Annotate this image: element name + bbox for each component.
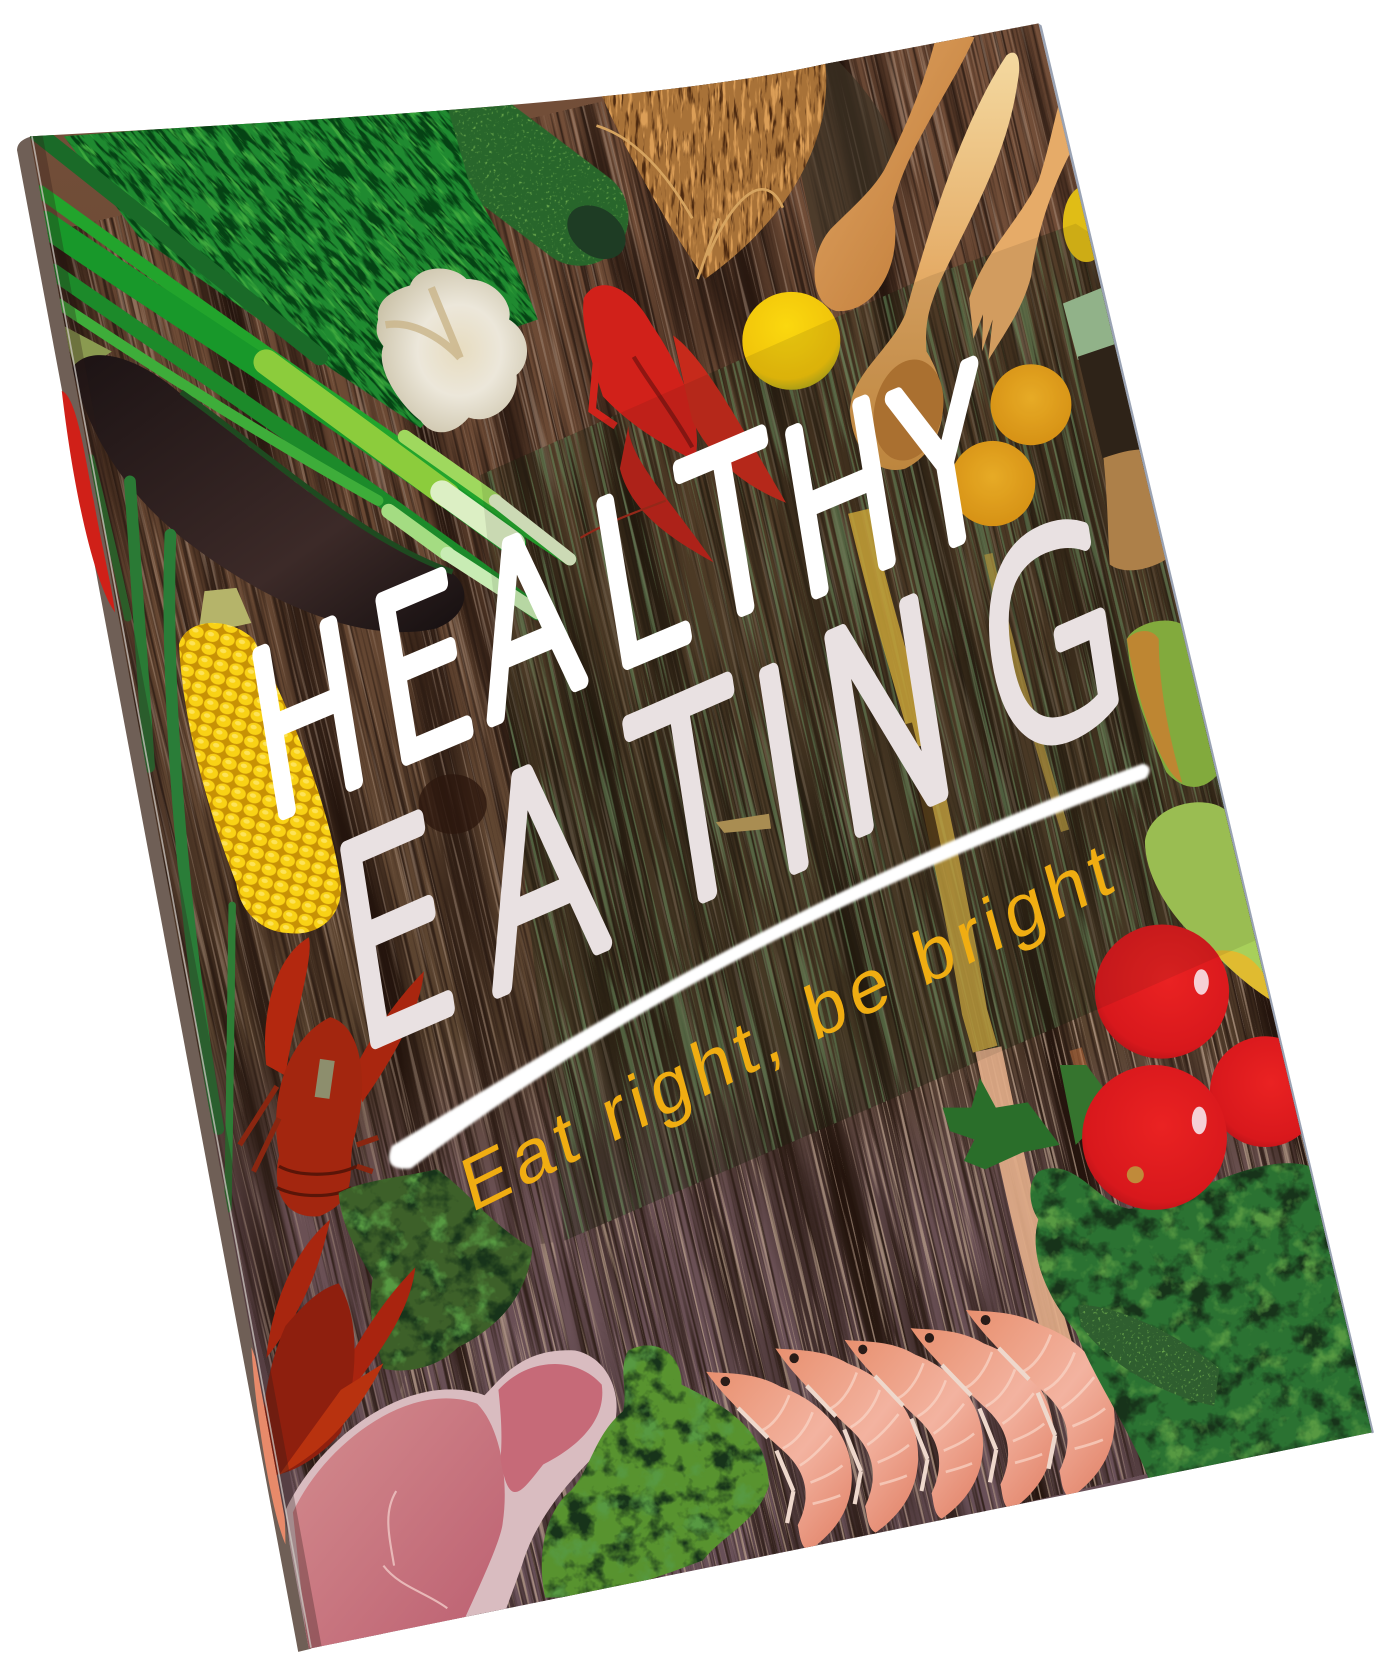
lettuce: left [339, 1169, 533, 1371]
orange fruit [950, 441, 1035, 526]
wooden fork [969, 106, 1070, 360]
crayfish: lower [263, 1219, 415, 1475]
bell pepper base yellow [1216, 950, 1270, 1000]
heading: HEALTHY: HEALTHY [232, 301, 1011, 883]
book spine edge [17, 136, 311, 1652]
bell pepper: green [1145, 802, 1274, 1001]
tagline: Eat right, be bright [453, 826, 1120, 1228]
tomato: front [1082, 1065, 1227, 1210]
coconut [596, 64, 826, 279]
scallions [37, 133, 570, 612]
parsley leaf behind tomato [1060, 1065, 1102, 1145]
wooden long spoon [850, 53, 1019, 470]
foliage: dill [64, 110, 538, 428]
lettuce: bottom [542, 1345, 769, 1598]
meat cut [285, 1350, 617, 1661]
orange fruit [990, 364, 1071, 445]
parsley sprig [943, 1078, 1060, 1169]
pepper mill [1063, 285, 1166, 570]
underline swoosh [389, 764, 1150, 1169]
overlay: translucent band [480, 224, 1385, 1241]
green blades [91, 458, 232, 1209]
parsley: right [1030, 1163, 1376, 1483]
vegetable: cucumber lower right [1078, 1305, 1219, 1406]
vegetable: cucumber [416, 104, 629, 266]
bell pepper: orange-green [1127, 620, 1220, 787]
wooden spoon [815, 32, 975, 311]
tomato: right [1210, 1036, 1321, 1147]
spine shading [30, 135, 322, 1651]
lemon [742, 292, 840, 390]
book right page edge [1038, 23, 1374, 1434]
garlic bulb [377, 269, 527, 432]
crayfish: middle [240, 937, 424, 1217]
shrimp row [706, 1310, 1115, 1551]
spine fold line [32, 136, 311, 1648]
eggplant [62, 325, 464, 632]
red chili on spine [62, 391, 115, 612]
heading: EATING: EATING [315, 458, 1146, 1121]
yellow fruit at edge [1062, 188, 1094, 262]
crayfish: upper [580, 285, 786, 562]
shrimp wrap on spine [251, 1347, 285, 1544]
tomato: upper [1095, 924, 1229, 1059]
corn cob [179, 588, 341, 934]
